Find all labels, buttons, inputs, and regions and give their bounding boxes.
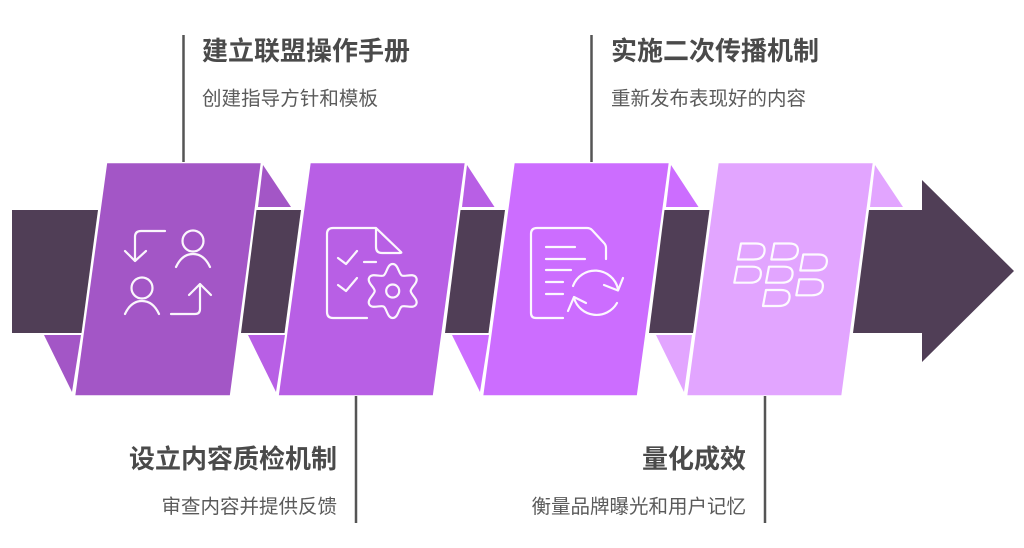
step 2 folded panel [248,162,494,396]
icon: checklist document with gear [327,228,417,318]
step 2 heading: 设立内容质检机制 [129,444,337,474]
icon: document with refresh arrows [531,228,623,318]
step 3 heading: 实施二次传播机制 [611,36,819,66]
step 4 description: 衡量品牌曝光和用户记忆 [531,496,746,518]
arrow tail segment [12,210,98,333]
step 1 description: 创建指导方针和模板 [202,88,378,110]
connector: step 3 [590,35,593,162]
step 4 folded panel [656,162,903,396]
arrow head [853,180,1014,362]
icon: seven skewed D shapes [734,244,827,306]
step 3 folded panel [452,162,698,396]
step 3 description: 重新发布表现好的内容 [611,88,806,110]
arrow segment 4 [649,210,710,333]
step 2 description: 审查内容并提供反馈 [161,496,337,518]
connector: step 1 [182,35,185,162]
arrow segment 2 [241,210,301,333]
step 4 heading: 量化成效 [642,444,746,474]
step 1 folded panel [44,162,291,396]
arrow segment 3 [445,210,505,333]
connector: step 4 [764,396,766,523]
icon: people exchange [125,230,211,314]
step 1 heading: 建立联盟操作手册 [202,36,410,66]
connector: step 2 [355,396,357,523]
